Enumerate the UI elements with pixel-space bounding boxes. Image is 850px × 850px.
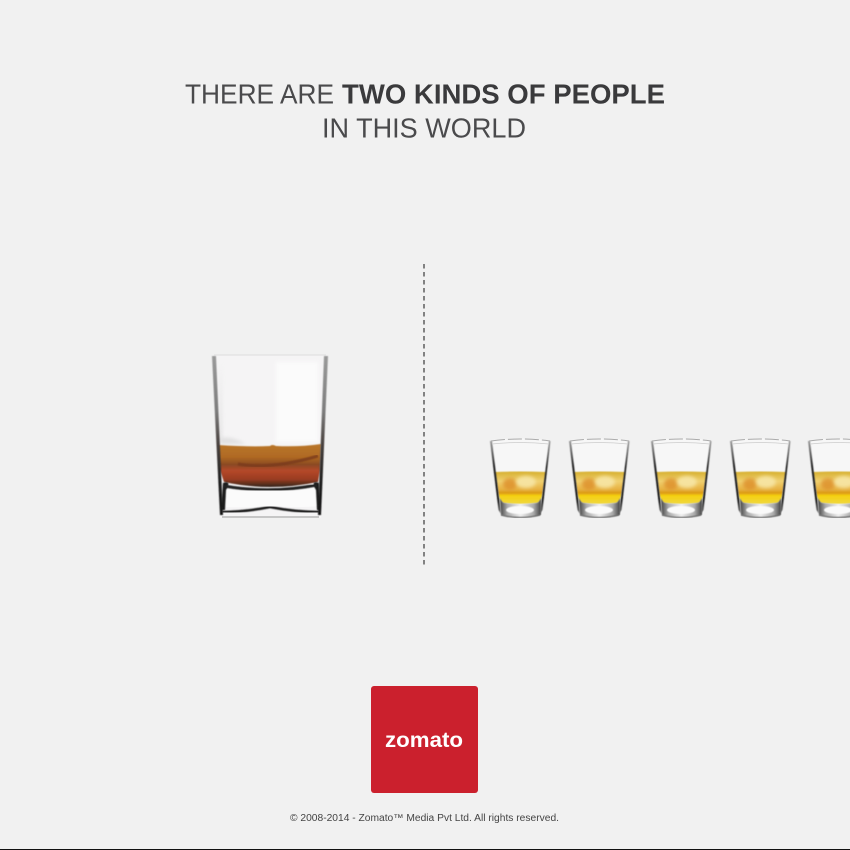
- shot glass 4: [730, 438, 790, 518]
- icon: row of shot glasses: [490, 438, 850, 518]
- bottom edge line: [0, 849, 850, 850]
- icon: large whisky glass: [212, 355, 328, 518]
- divider: dashed vertical line: [423, 264, 425, 566]
- title line 1 regular: THERE ARE: [185, 78, 334, 109]
- copyright footer: © 2008-2014 - Zomato™ Media Pvt Ltd. All rights reserved.: [290, 813, 559, 824]
- title line 2: IN THIS WORLD: [322, 113, 526, 144]
- logo: zomato: [371, 686, 478, 793]
- shot glass 1: [490, 438, 550, 518]
- shot glass 5: [808, 438, 850, 518]
- title line 1 bold: TWO KINDS OF PEOPLE: [342, 78, 665, 109]
- shot glass 2: [569, 438, 630, 518]
- shot glass 3: [651, 438, 712, 518]
- title: [185, 78, 665, 144]
- logo: zomato: zomato: [385, 729, 463, 752]
